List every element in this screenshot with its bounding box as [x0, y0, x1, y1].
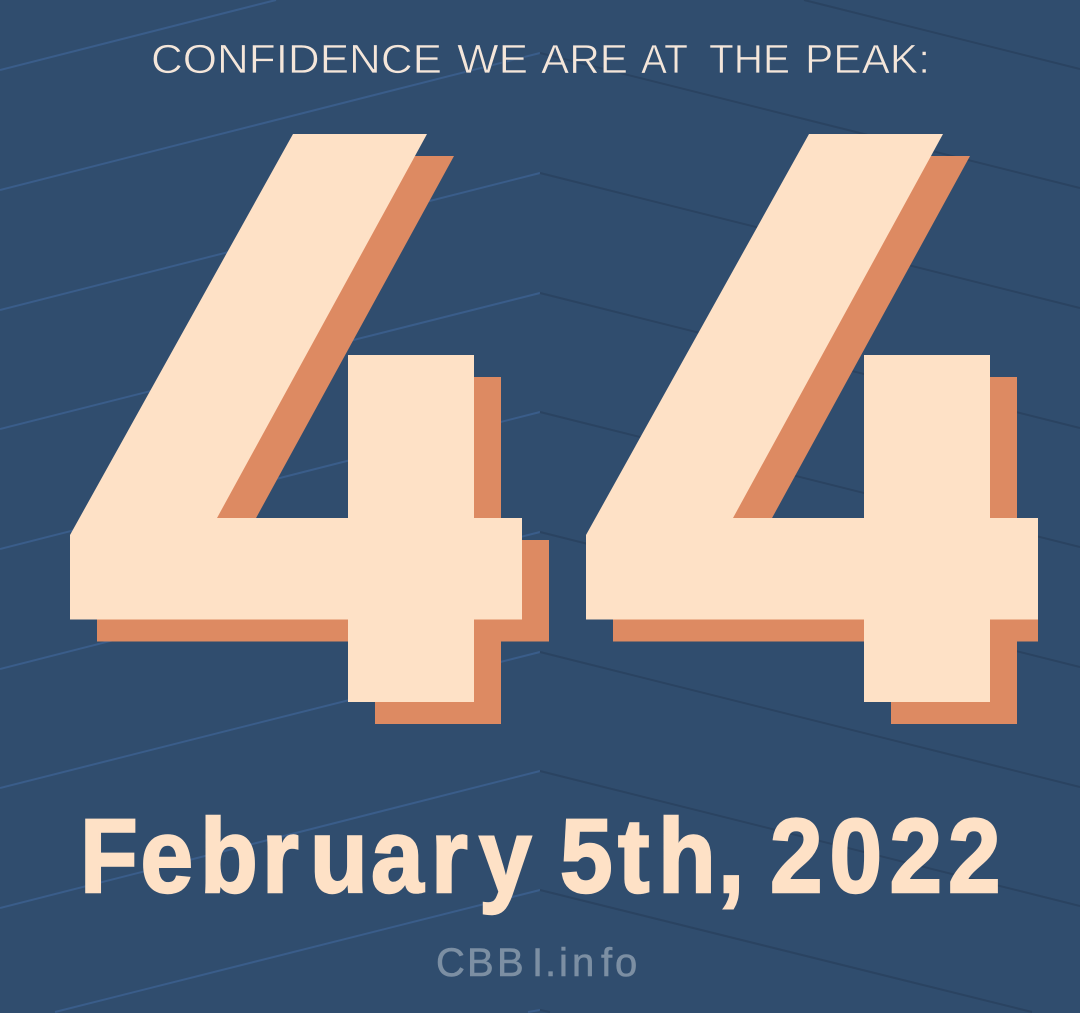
- digit: second 4: [586, 134, 1038, 724]
- date: February 5th, 2022: 2022: [770, 798, 1001, 915]
- heading: confidence we are at the peak: THE: [709, 36, 790, 82]
- date: February 5th, 2022: 5th,: [560, 798, 744, 915]
- heading: confidence we are at the peak: ARE: [541, 36, 628, 82]
- date: February 5th, 2022: [80, 798, 1001, 915]
- heading: confidence we are at the peak: [151, 36, 930, 82]
- source label: CBBI.info: CBBI.info: [436, 941, 637, 985]
- large number 44 with offset shadow: [70, 134, 1038, 724]
- date: February 5th, 2022: February: [80, 798, 532, 915]
- heading: confidence we are at the peak: PEAK:: [805, 36, 930, 82]
- heading: confidence we are at the peak: WE: [457, 36, 528, 82]
- heading: confidence we are at the peak: AT: [641, 36, 688, 82]
- digit: first 4: [70, 134, 549, 724]
- heading: confidence we are at the peak: CONFIDENCE: [151, 36, 442, 82]
